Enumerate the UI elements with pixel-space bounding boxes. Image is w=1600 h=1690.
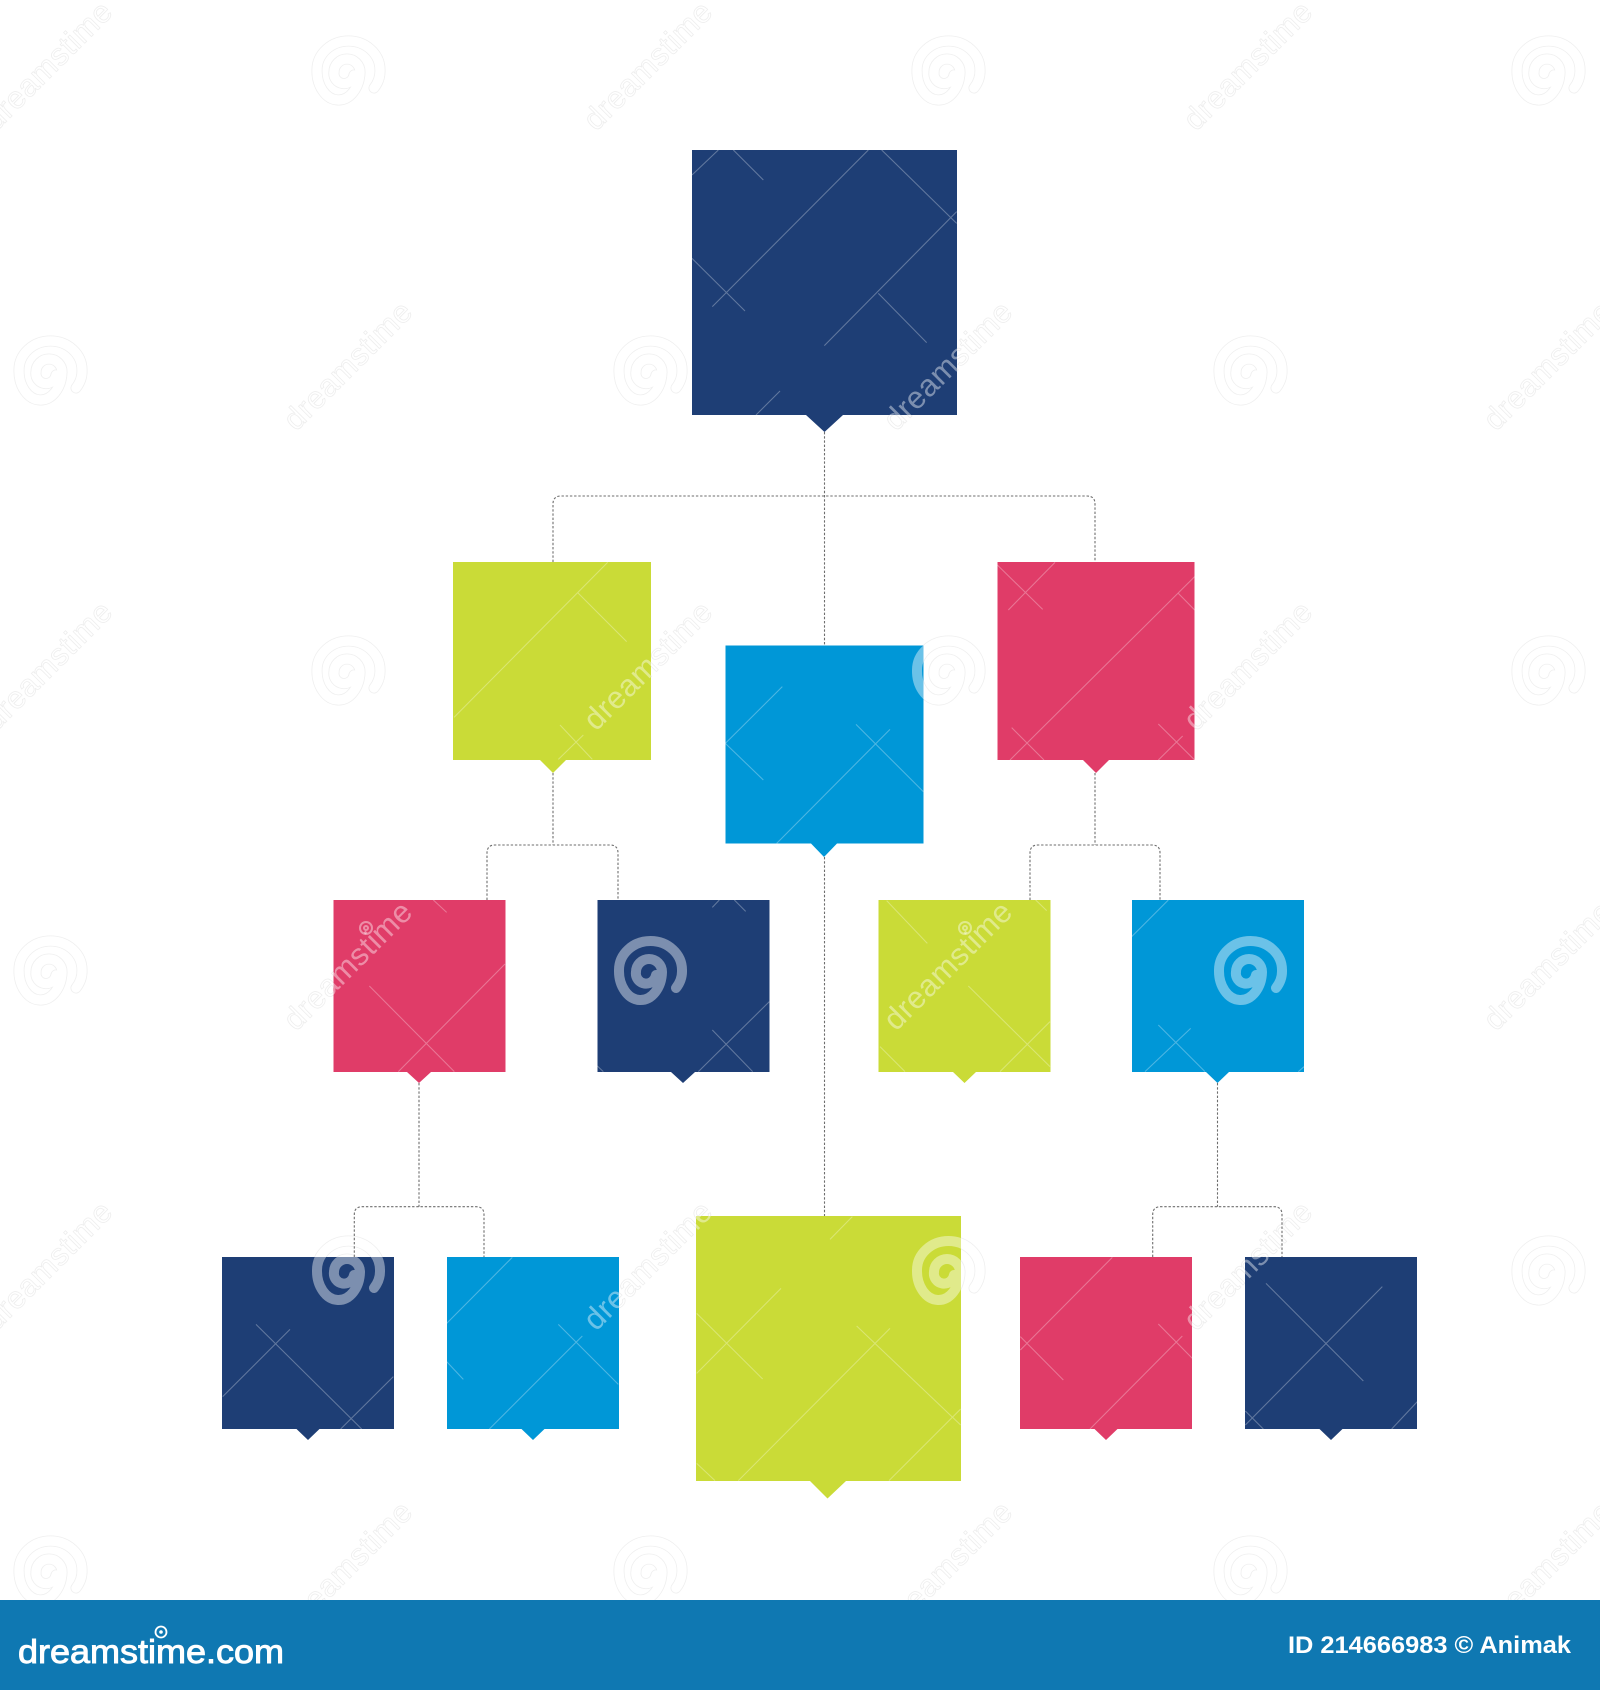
watermark background text: dreamstime [276,294,419,437]
watermark background text: dreamstime [576,1194,719,1337]
watermark overlay on coloured boxes [312,348,1287,1329]
watermark spirals on boxes [317,641,1282,1300]
node: level three green box [878,900,1050,1083]
connector: green node to children [487,773,618,900]
node: level two green box [453,562,651,773]
watermark background text: dreamstime [876,294,1019,437]
watermark text on boxes: dreamstime [1176,594,1319,737]
connector: red node to children [1030,773,1160,900]
connector: blue centre node to large green node [824,857,826,1216]
connector: red level three node to children [354,1083,484,1257]
watermark background text: dreamstime [276,1494,419,1637]
watermark text on boxes: dreamstime [876,894,1019,1037]
watermark text on boxes: dreamstime [276,894,419,1037]
small watermark marks on boxes [359,921,972,935]
node: level three blue box [1132,900,1304,1083]
footer bar [0,1600,1600,1690]
node: level two centre blue box [725,646,924,857]
node: level two red box [997,562,1195,773]
watermark background text: dreamstime [576,594,719,737]
node: root navy box [692,150,957,432]
watermark background text: dreamstime [876,1494,1019,1637]
footer logo text: dreamstime.com [18,1633,284,1670]
node: large bottom green box [696,1216,961,1498]
node: level four blue box [447,1257,619,1440]
watermark text on boxes: dreamstime [576,594,719,737]
watermark background text: dreamstime [1176,594,1319,737]
node: level four navy box left [222,1257,394,1440]
watermark text on boxes: dreamstime [1176,1194,1319,1337]
watermark text on boxes: dreamstime [576,1194,719,1337]
node: level three navy box [597,900,770,1083]
watermark text on boxes: dreamstime [876,294,1019,437]
node: level four red box [1020,1257,1192,1440]
watermark background text: dreamstime [876,894,1019,1037]
watermark background text: dreamstime [276,894,419,1037]
connectors: dotted tree lines [354,432,1282,1257]
footer image id and credit: ID 214666983 © Animak [1288,1632,1572,1659]
watermark text on boxes [334,348,1268,1329]
node: level three red box [334,900,506,1083]
connector: blue level three node to children [1153,1083,1282,1257]
node: level four navy box right [1245,1257,1417,1440]
watermark background text: dreamstime [1176,1194,1319,1337]
connector: root to level two [553,432,1095,646]
